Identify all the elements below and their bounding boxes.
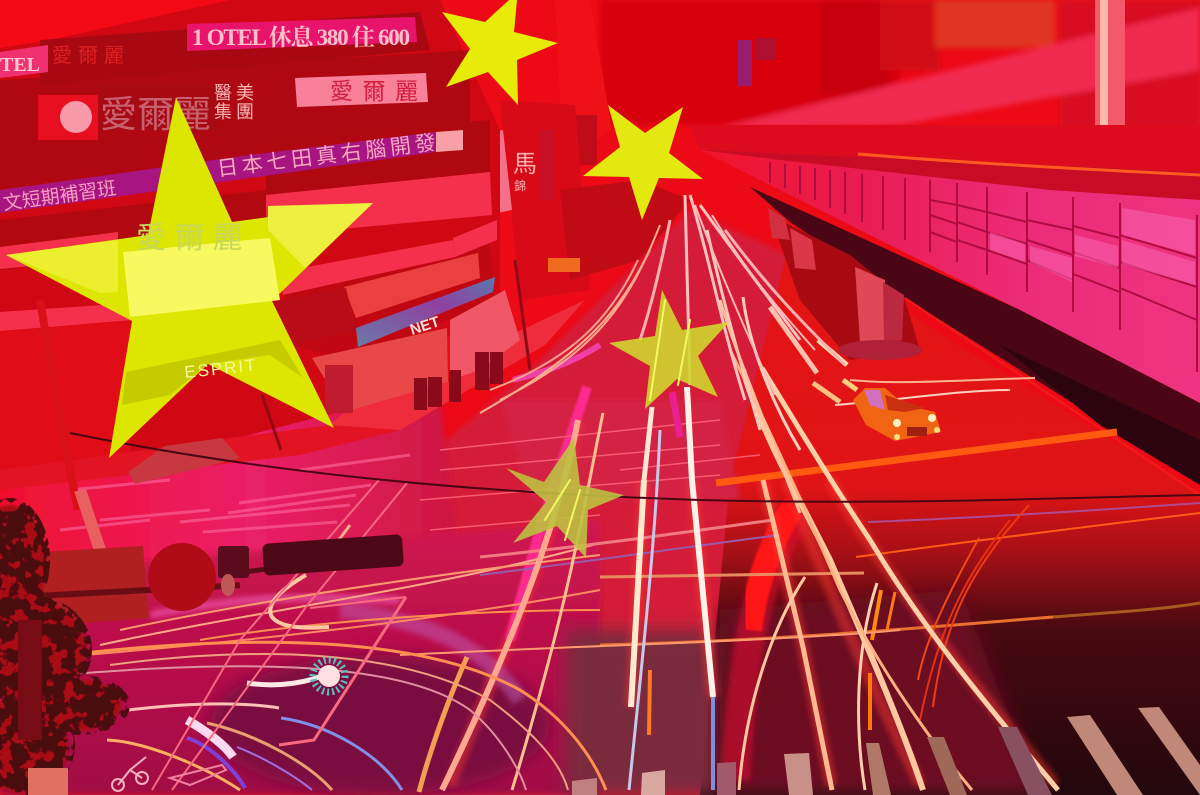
- sign: left fragment: TEL: [0, 54, 40, 76]
- sign: purple scrolling banner: 日本七田真右腦開發: [216, 131, 437, 181]
- star: third: [609, 290, 729, 409]
- bright streaks: [442, 195, 1058, 790]
- star: top: [442, 0, 558, 105]
- star: second: [583, 105, 703, 220]
- sign: clinic white banner: 愛爾麗: [330, 78, 418, 104]
- median under bridge: [770, 215, 920, 360]
- sign: clinic name: [38, 83, 254, 140]
- tree at lower left: [0, 498, 130, 795]
- star: fourth: [506, 438, 624, 558]
- esprit text: ESPRIT: [183, 355, 258, 382]
- sign: shop windows upper: [344, 253, 480, 318]
- tree backing foliage: [0, 505, 121, 793]
- sign: clinic name: 集團: [214, 102, 254, 122]
- building left: hotel facade with illuminated signs: [0, 0, 585, 490]
- pedestrians: [325, 352, 503, 413]
- street lamp and poles: [40, 260, 530, 550]
- bridge upper orange edge: [858, 154, 1200, 175]
- background: distant signs: [738, 0, 1125, 125]
- sign: clinic white banner: [295, 73, 428, 107]
- comet burst light: [313, 660, 345, 692]
- background: far street tower: [484, 0, 690, 300]
- right pale building: [450, 290, 520, 380]
- sign: clinic name: 醫美: [214, 83, 254, 103]
- horizontal streaks lower left: [85, 420, 900, 655]
- star: bright panel: [123, 238, 280, 317]
- tree trunk: [18, 620, 42, 740]
- bridge: elevated viaduct at right: [690, 125, 1200, 495]
- sign: hotel: [187, 17, 417, 51]
- sign: left fragment: [0, 45, 48, 78]
- bridge panels: [770, 162, 1197, 372]
- sign: NET blue band: NET: [408, 313, 442, 339]
- sign: purple scrolling banner: [0, 130, 463, 215]
- sign: esprit wall: [272, 288, 356, 346]
- overlay trails across lower stars: [545, 300, 690, 540]
- background: upper sky blocks: [600, 0, 1200, 130]
- bridge magenta highlights: [990, 208, 1195, 285]
- sidewalk: [300, 300, 585, 450]
- sign: hotel: 1 OTEL 休息 380 住 600: [192, 25, 410, 50]
- car at left: [128, 438, 240, 484]
- overhead wire: [70, 433, 1200, 502]
- curved streaks lower left: [60, 525, 606, 790]
- sign: clinic name: 愛爾麗: [100, 94, 211, 135]
- light trails: long exposure traffic: [60, 195, 1200, 792]
- background: far street tower: 馬: [513, 151, 537, 178]
- crosswalk stripes: [572, 707, 1200, 795]
- crosswalk and lane markings: [60, 455, 1200, 795]
- traffic signal and road sign: [35, 534, 404, 626]
- bicycle lane symbol: [112, 757, 148, 791]
- glow layer: [450, 420, 1055, 785]
- taxi: [853, 388, 941, 441]
- bridge underside: [750, 187, 1200, 485]
- bridge pillars: [855, 267, 885, 345]
- red sweep near median: [735, 510, 800, 780]
- sign: pale bands: [0, 172, 497, 331]
- flag stars: [6, 0, 729, 558]
- orange streaks: [419, 432, 1200, 792]
- sign: NET blue band: [356, 277, 495, 347]
- lower left magenta wash: [513, 345, 600, 380]
- storefront windows: [312, 328, 448, 412]
- sign text over the large star: 愛 爾 麗: [136, 222, 243, 255]
- background: far street tower: 錦: [514, 178, 526, 193]
- sign: purple scrolling banner: 文短期補習班: [2, 177, 118, 215]
- star: large: [6, 97, 373, 458]
- utility box: [28, 768, 68, 795]
- street surface: [0, 210, 1200, 795]
- sign: neon characters: 愛爾麗: [52, 44, 130, 67]
